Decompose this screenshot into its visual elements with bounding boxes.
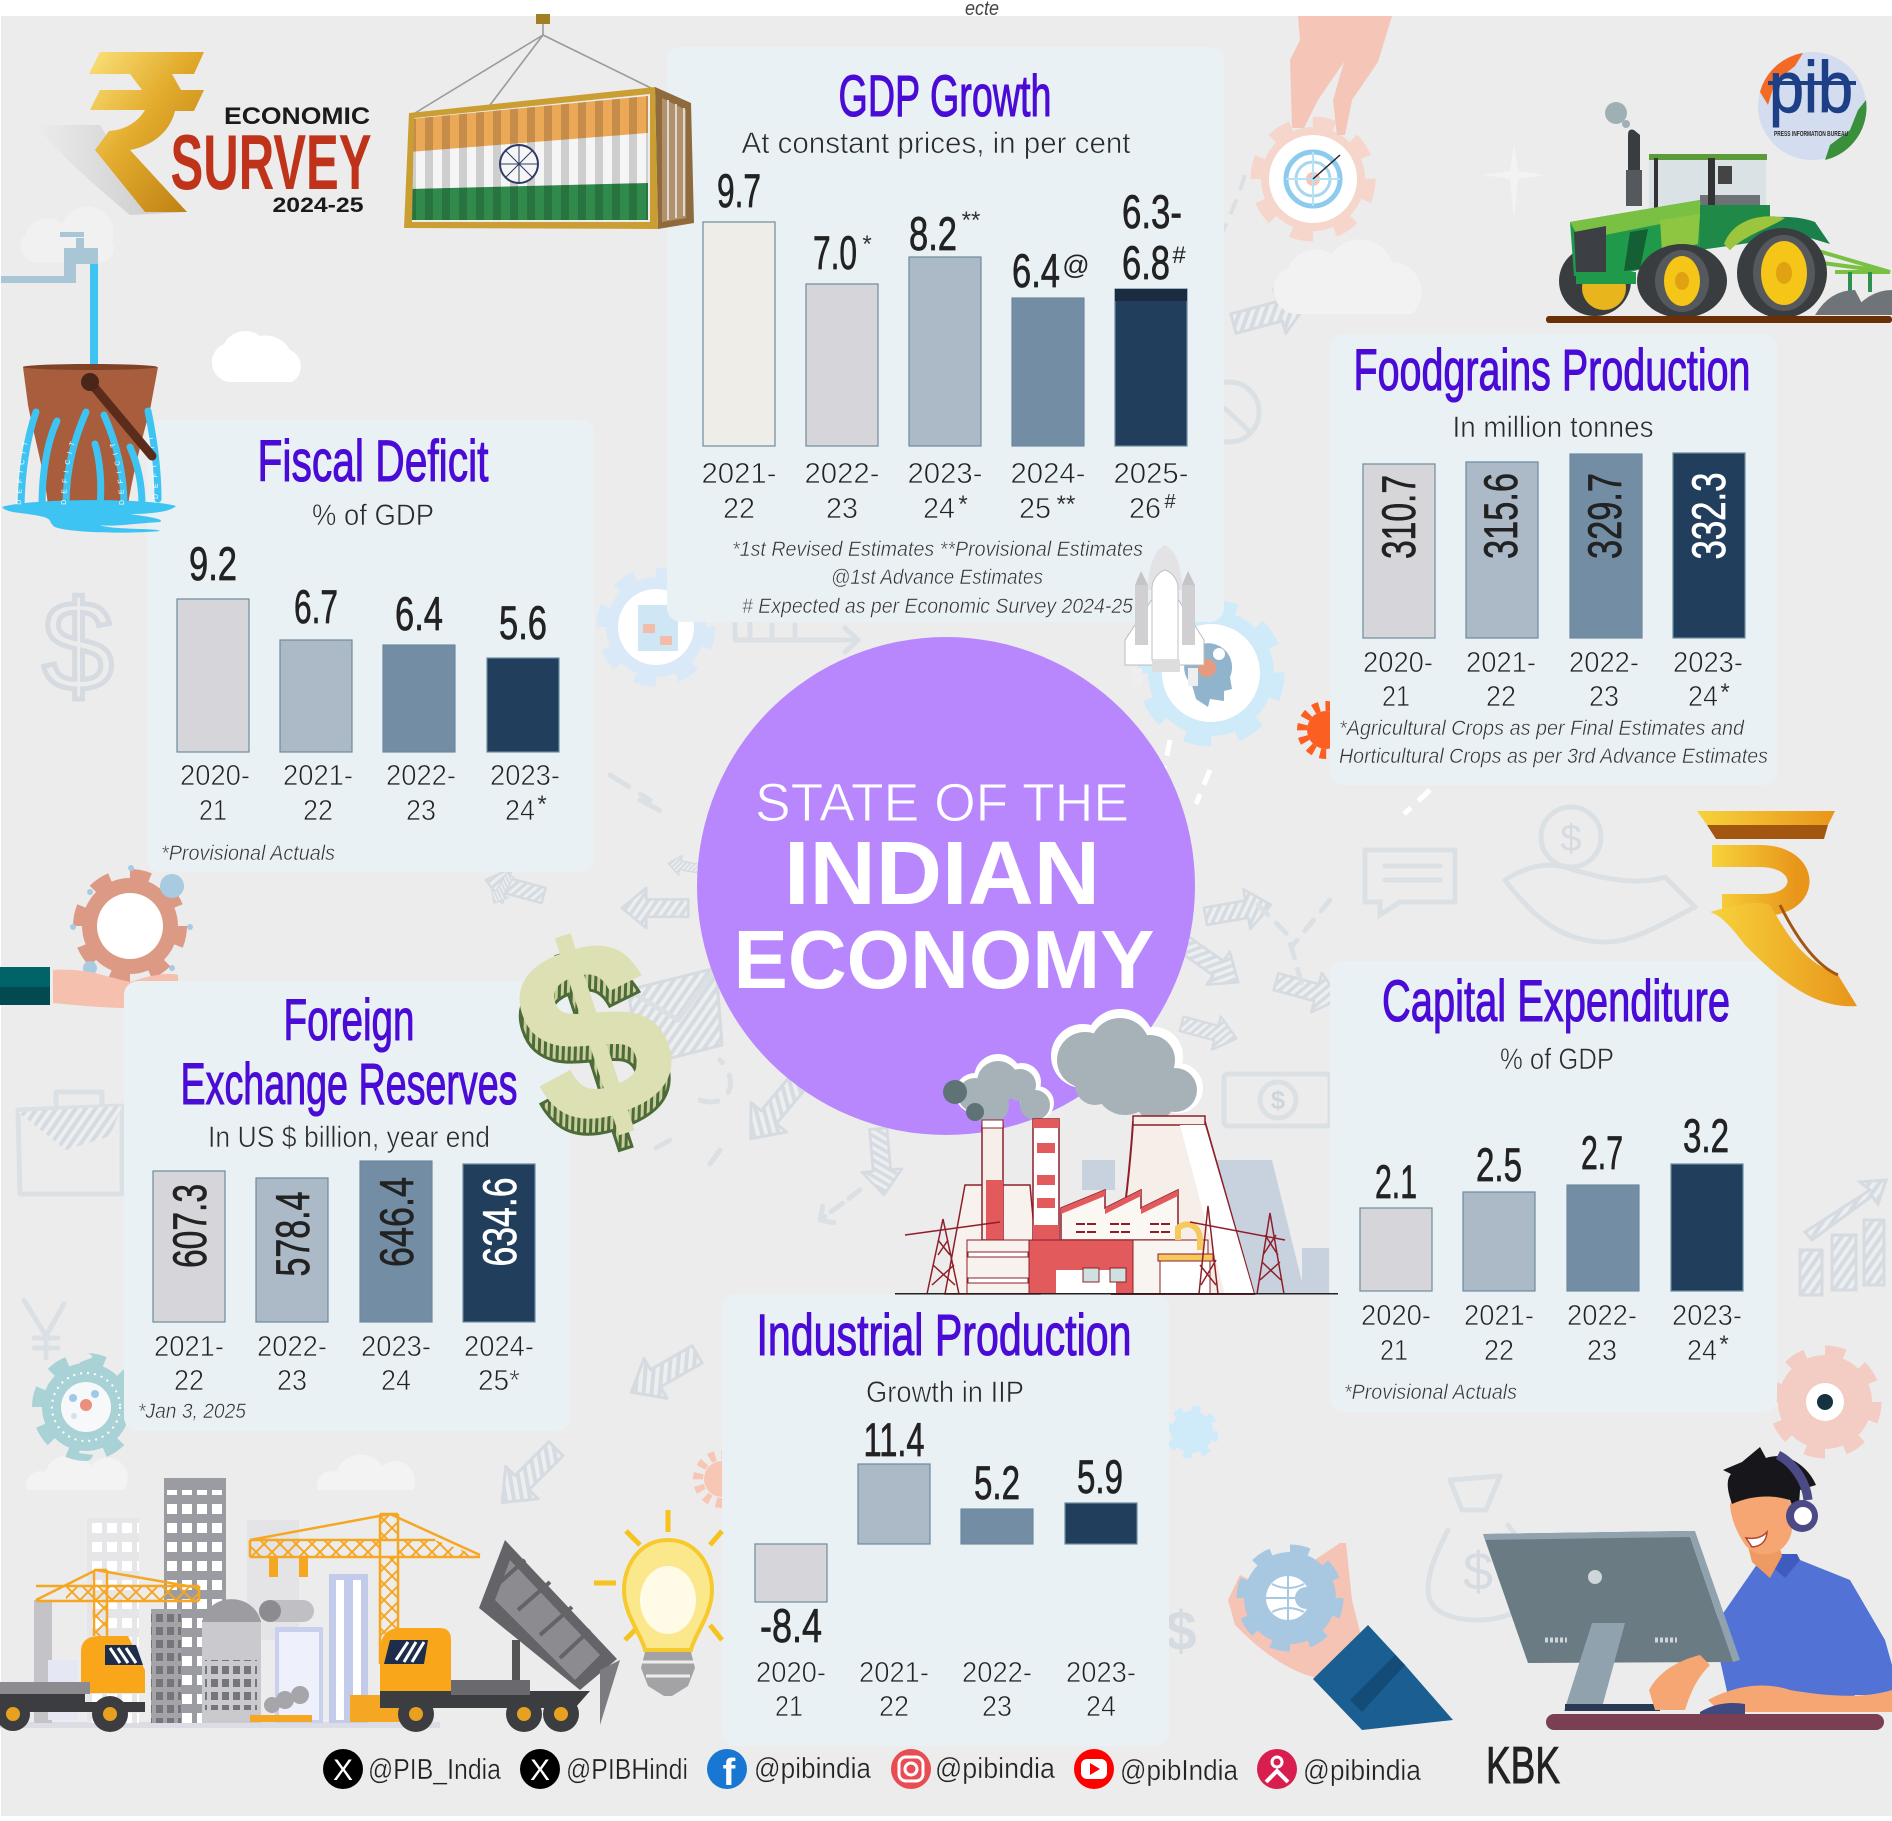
heading: industrial production: Industrial Production: [756, 1303, 1132, 1368]
panel: fiscal deficit: [147, 420, 594, 872]
central title circle: STATE OF THE: [755, 773, 1129, 833]
panel: foodgrains production: [1330, 334, 1777, 785]
bar chart: industrial production: 5.9: [1077, 1450, 1123, 1503]
bar chart: GDP growth: **: [1057, 491, 1075, 518]
bar chart: fiscal deficit: 22: [303, 795, 333, 827]
bar chart: GDP growth: 6.8: [1122, 236, 1170, 289]
bar chart: reserves: 25*: [478, 1365, 520, 1397]
credit: KBK: KBK: [1486, 1737, 1560, 1795]
footnote: *1st Revised Estimates **Provisional Estimates: [732, 538, 1143, 561]
background doodles: $: [42, 575, 114, 718]
bar chart: foodgrains: [1363, 453, 1745, 713]
bar chart: foodgrains: 2023-: [1673, 647, 1743, 679]
heading: foreign exchange reserves: Exchange Reserves: [180, 1052, 518, 1117]
central title circle: [697, 637, 1195, 1135]
bar chart: foodgrains: 332.3: [1682, 472, 1735, 560]
bar chart: foodgrains: 2020-: [1363, 647, 1433, 679]
background doodles: $: [1165, 1599, 1197, 1662]
bar chart: fiscal deficit: 2021-: [283, 760, 353, 792]
bar chart: GDP growth: 9.7: [717, 164, 761, 217]
bar chart: GDP growth: 6.3-: [1122, 185, 1182, 238]
logo: PIB: PRESS INFORMATION BUREAU: [1774, 131, 1848, 138]
logo: Economic Survey: SURVEY: [170, 118, 372, 206]
bar chart: reserves: 24: [381, 1365, 411, 1397]
footnote: Horticultural Crops as per 3rd Advance Estimates: [1339, 745, 1768, 768]
bar chart: industrial production: -8.4: [760, 1599, 822, 1652]
footnote: *Provisional Actuals: [161, 842, 335, 865]
illustration: man at computer: [1483, 1447, 1892, 1730]
bar chart: capital expenditure: 2020-: [1361, 1300, 1431, 1332]
bar chart: fiscal deficit: [177, 537, 560, 827]
illustration: rocket: [1125, 545, 1204, 686]
gear: sun: [1302, 706, 1350, 754]
bar chart: reserves: 578.4: [266, 1192, 319, 1276]
logo: PIB: [1758, 48, 1867, 160]
logo: Economic Survey: [35, 52, 372, 217]
bar chart: industrial production: 2023-: [1066, 1657, 1136, 1689]
icon: X: X: [333, 1754, 353, 1787]
bar chart: reserves: 634.6: [473, 1178, 526, 1266]
panel: capital expenditure: [1330, 961, 1777, 1412]
bar chart: fiscal deficit: 24: [505, 795, 535, 827]
bar chart: GDP growth: *: [862, 231, 872, 258]
logo: Economic Survey: ECONOMIC: [224, 103, 370, 130]
subtitle: In US $ billion, year end: [208, 1121, 490, 1154]
icon: X: X: [530, 1754, 550, 1787]
panel: industrial production: [722, 1294, 1169, 1746]
icon: Koo: [1257, 1749, 1297, 1789]
bar chart: capital expenditure: 2023-: [1672, 1300, 1742, 1332]
bar chart: reserves: 607.3: [163, 1184, 216, 1268]
central title circle: ECONOMY: [734, 913, 1154, 1006]
illustration: dollar sign: $: [484, 877, 703, 1186]
bar chart: reserves: 22: [174, 1365, 204, 1397]
subtitle: Growth in IIP: [866, 1376, 1024, 1409]
illustration: city, cranes and trucks: [0, 1478, 620, 1732]
bar chart: fiscal deficit: 21: [199, 795, 227, 827]
footnote: [1339, 717, 1768, 768]
logo: Economic Survey: 2024-25: [272, 194, 364, 217]
bar chart: capital expenditure: 24: [1687, 1335, 1717, 1367]
illustration: factory: [895, 1009, 1338, 1294]
bar chart: foodgrains: 2022-: [1569, 647, 1639, 679]
heading: capital expenditure: Capital Expenditure: [1382, 969, 1730, 1034]
bar chart: GDP growth: @: [1062, 250, 1090, 280]
bar chart: GDP growth: 2025-: [1114, 458, 1188, 490]
bar chart: fiscal deficit: 2022-: [386, 760, 456, 792]
gear: hand: [0, 865, 193, 1008]
bar chart: foodgrains: 21: [1382, 681, 1410, 713]
bar chart: fiscal deficit: 23: [406, 795, 436, 827]
bar chart: foodgrains: 22: [1486, 681, 1516, 713]
illustration: dollar sign: $: [483, 895, 702, 1203]
bar chart: industrial production: [755, 1413, 1137, 1723]
illustration: gold rupee: [1697, 811, 1857, 1006]
bar chart: industrial production: 23: [982, 1691, 1012, 1723]
bar chart: industrial production: 21: [775, 1691, 803, 1723]
bar chart: reserves: 23: [277, 1365, 307, 1397]
bar chart: fiscal deficit: 6.4: [395, 587, 443, 640]
bar chart: GDP growth: 26: [1129, 493, 1161, 525]
gear: teal: [39, 1360, 133, 1454]
bar chart: GDP growth: 7.0: [813, 226, 857, 279]
bar chart: GDP growth: #: [1164, 491, 1176, 513]
bar chart: industrial production: 5.2: [974, 1456, 1020, 1509]
bar chart: capital expenditure: 23: [1587, 1335, 1617, 1367]
bar chart: foodgrains: 24: [1688, 681, 1718, 713]
bar chart: foodgrains: 23: [1589, 681, 1619, 713]
bar chart: capital expenditure: [1360, 1109, 1743, 1367]
bar chart: foodgrains: 315.6: [1474, 473, 1527, 559]
illustration: water tap and leaking bucket: DEFICIT: [16, 442, 28, 504]
illustration: tractor: [1546, 102, 1892, 323]
panel: GDP growth: [667, 47, 1224, 622]
illustration: water tap and leaking bucket: [1, 232, 176, 533]
heading: foreign exchange reserves: Foreign: [284, 988, 414, 1053]
icon: X: [520, 1749, 560, 1789]
bar chart: capital expenditure: 2.1: [1375, 1155, 1417, 1208]
gear: pale blue: [1169, 1409, 1215, 1455]
bar chart: capital expenditure: 3.2: [1683, 1109, 1729, 1162]
bar chart: GDP growth: 2021-: [702, 458, 776, 490]
bar chart: GDP growth: 6.4: [1012, 244, 1060, 297]
background doodles: $: [1463, 1542, 1493, 1602]
bar chart: GDP growth: 2024-: [1010, 458, 1086, 490]
handle: PIB_India: @PIB_India: [368, 1754, 502, 1786]
footnote: *Jan 3, 2025: [138, 1400, 246, 1423]
footnote: *Agricultural Crops as per Final Estimates and: [1339, 717, 1745, 740]
illustration: light bulb: [594, 1510, 722, 1696]
bar chart: fiscal deficit: 9.2: [189, 537, 237, 590]
gear: target with hand: [1258, 16, 1392, 234]
handle: PIBHindi: @PIBHindi: [566, 1754, 688, 1786]
bar chart: GDP growth: #: [1172, 242, 1186, 269]
icon: YouTube: [1074, 1749, 1114, 1789]
bar chart: foodgrains: 329.7: [1578, 473, 1631, 559]
bar chart: fiscal deficit: 2023-: [490, 760, 560, 792]
bar chart: industrial production: 2021-: [859, 1657, 929, 1689]
bar chart: capital expenditure: 2.5: [1476, 1138, 1522, 1191]
bar chart: industrial production: 24: [1086, 1691, 1116, 1723]
bar chart: foodgrains: *: [1720, 679, 1730, 706]
icon: X: [323, 1749, 363, 1789]
bar chart: GDP growth: 24: [923, 493, 955, 525]
bar chart: GDP growth: 22: [723, 493, 755, 525]
bar chart: industrial production: 22: [879, 1691, 909, 1723]
footnote: # Expected as per Economic Survey 2024-25: [742, 595, 1133, 618]
bar chart: industrial production: 2020-: [756, 1657, 826, 1689]
bar chart: GDP growth: 25: [1019, 493, 1051, 525]
gear: head: [1145, 607, 1277, 739]
handle: pibindia: @pibindia: [935, 1753, 1056, 1785]
bar chart: fiscal deficit: 2020-: [180, 760, 250, 792]
gear: pale orange: [698, 1455, 746, 1503]
clouds: [21, 206, 1422, 1490]
bar chart: GDP growth: 23: [826, 493, 858, 525]
bar chart: fiscal deficit: *: [537, 791, 547, 818]
bar chart: capital expenditure: 2021-: [1464, 1300, 1534, 1332]
bar chart: GDP growth: 2022-: [804, 458, 880, 490]
subtitle: At constant prices, in per cent: [742, 127, 1131, 160]
bar chart: foodgrains: 2021-: [1466, 647, 1536, 679]
illustration: shipping container with Indian flag: [404, 14, 694, 229]
subtitle: % of GDP: [312, 499, 434, 532]
heading: foreign exchange reserves: [180, 988, 518, 1117]
footnote: @1st Advance Estimates: [831, 566, 1043, 589]
bar chart: industrial production: 11.4: [864, 1413, 924, 1466]
bar chart: capital expenditure: 2.7: [1581, 1126, 1623, 1179]
icon: Instagram: [891, 1749, 931, 1789]
icon: Facebook: [707, 1749, 747, 1794]
footnote: [732, 538, 1143, 618]
central title circle: INDIAN: [784, 824, 1100, 924]
heading: fiscal deficit: Fiscal Deficit: [258, 429, 488, 494]
illustration: water tap and leaking bucket: DEFICIT: [148, 437, 158, 498]
bar chart: reserves: 2022-: [257, 1331, 327, 1363]
icon: Facebook: f: [723, 1752, 736, 1794]
bar chart: foodgrains: 310.7: [1372, 475, 1425, 559]
illustration: water tap and leaking bucket: DEFICIT: [110, 444, 124, 504]
subtitle: In million tonnes: [1452, 411, 1654, 444]
handle: pibindia: @pibindia: [1303, 1755, 1422, 1787]
footnote: *Provisional Actuals: [1344, 1381, 1517, 1404]
bar chart: reserves: 2023-: [361, 1331, 431, 1363]
logo: PIB: pib: [1769, 48, 1853, 128]
bar chart: GDP growth: **: [962, 207, 980, 234]
panel: foreign exchange reserves: [124, 981, 570, 1431]
heading: GDP growth: GDP Growth: [838, 64, 1052, 129]
bar chart: capital expenditure: 2022-: [1567, 1300, 1637, 1332]
bar chart: GDP growth: 2023-: [908, 458, 982, 490]
bar chart: industrial production: 2022-: [962, 1657, 1032, 1689]
illustration: hand holding gear: [1228, 1543, 1453, 1730]
illustration: water tap and leaking bucket: DEFICIT: [61, 441, 74, 504]
bar chart: reserves: 646.4: [370, 1177, 423, 1267]
gear: eye: [1775, 1352, 1875, 1452]
social media footer: [323, 1749, 1422, 1794]
bar chart: reserves: 2024-: [464, 1331, 534, 1363]
bar chart: fiscal deficit: 6.7: [294, 580, 338, 633]
bar chart: capital expenditure: *: [1719, 1331, 1729, 1358]
bar chart: GDP growth: *: [958, 491, 968, 518]
gear: calculator: [603, 574, 709, 680]
bar chart: GDP growth: [702, 164, 1188, 525]
background doodles: $: [1271, 1085, 1286, 1115]
handle: pibIndia: @pibIndia: [1120, 1755, 1239, 1787]
bar chart: reserves: [153, 1161, 535, 1397]
bar chart: capital expenditure: 21: [1380, 1335, 1408, 1367]
handle: pibindia: @pibindia: [754, 1753, 872, 1785]
background doodles: $: [1560, 818, 1582, 860]
bar chart: fiscal deficit: 5.6: [499, 596, 547, 649]
subtitle: % of GDP: [1500, 1043, 1614, 1076]
bar chart: reserves: 2021-: [154, 1331, 224, 1363]
bar chart: GDP growth: 8.2: [909, 207, 957, 260]
bar chart: capital expenditure: 22: [1484, 1335, 1514, 1367]
